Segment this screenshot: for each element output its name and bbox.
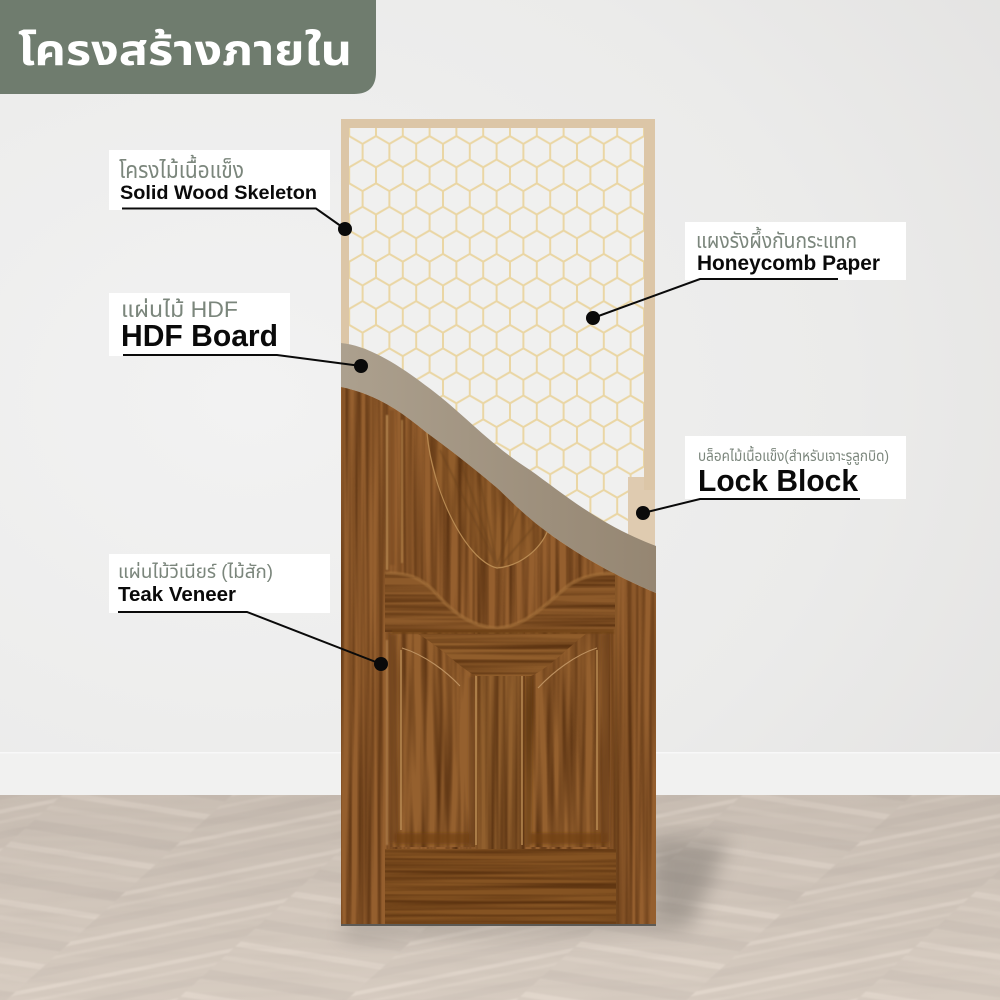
callout: solid wood skeleton: Solid Wood Skeleton <box>120 183 317 204</box>
panel: honeycomb paper core <box>349 128 644 568</box>
title tab: โครงสร้างภายใน <box>18 27 352 75</box>
callout: teak veneer: แผ่นไม้วีเนียร์ (ไม้สัก) <box>118 560 273 583</box>
callout: HDF board: แผ่นไม้ HDF <box>121 297 238 322</box>
callout: honeycomb paper: แผงรังผึ้งกันกระแทก <box>696 226 857 253</box>
lock block <box>628 477 655 560</box>
arched lower top panel <box>392 629 614 688</box>
callout: lock block: บล็อคไม้เนื้อแข็ง(สำหรับเจาะรูลูกบิด) <box>698 445 889 465</box>
door bottom edge shadow <box>341 924 656 926</box>
callout: honeycomb paper <box>586 222 906 325</box>
callout: lock block: Lock Block <box>698 463 859 498</box>
herringbone wooden floor <box>0 795 1000 1000</box>
middle curved rail <box>385 573 615 632</box>
callout: teak veneer: Teak Veneer <box>118 584 236 606</box>
callout: solid wood skeleton: โครงไม้เนื้อแข็ง <box>119 154 244 183</box>
callout: HDF board <box>109 293 368 373</box>
three lower raised panels <box>389 632 610 850</box>
panel: teak veneer <box>341 380 656 925</box>
callout: teak veneer <box>109 554 388 671</box>
door shadow on floor <box>345 838 730 936</box>
bottom rail <box>385 849 616 925</box>
solid wood skeleton frame <box>341 119 655 560</box>
door cutaway <box>341 119 656 926</box>
callout: lock block <box>636 436 906 520</box>
callout: honeycomb paper: Honeycomb Paper <box>697 252 880 275</box>
wall background <box>0 0 1000 796</box>
title tab <box>0 0 376 94</box>
callout: solid wood skeleton <box>109 150 352 236</box>
veneer stile trim lines <box>387 410 616 925</box>
upper oval raised panel <box>427 425 548 568</box>
callout: HDF board: HDF Board <box>121 318 278 353</box>
panel: HDF board layer <box>341 343 656 593</box>
